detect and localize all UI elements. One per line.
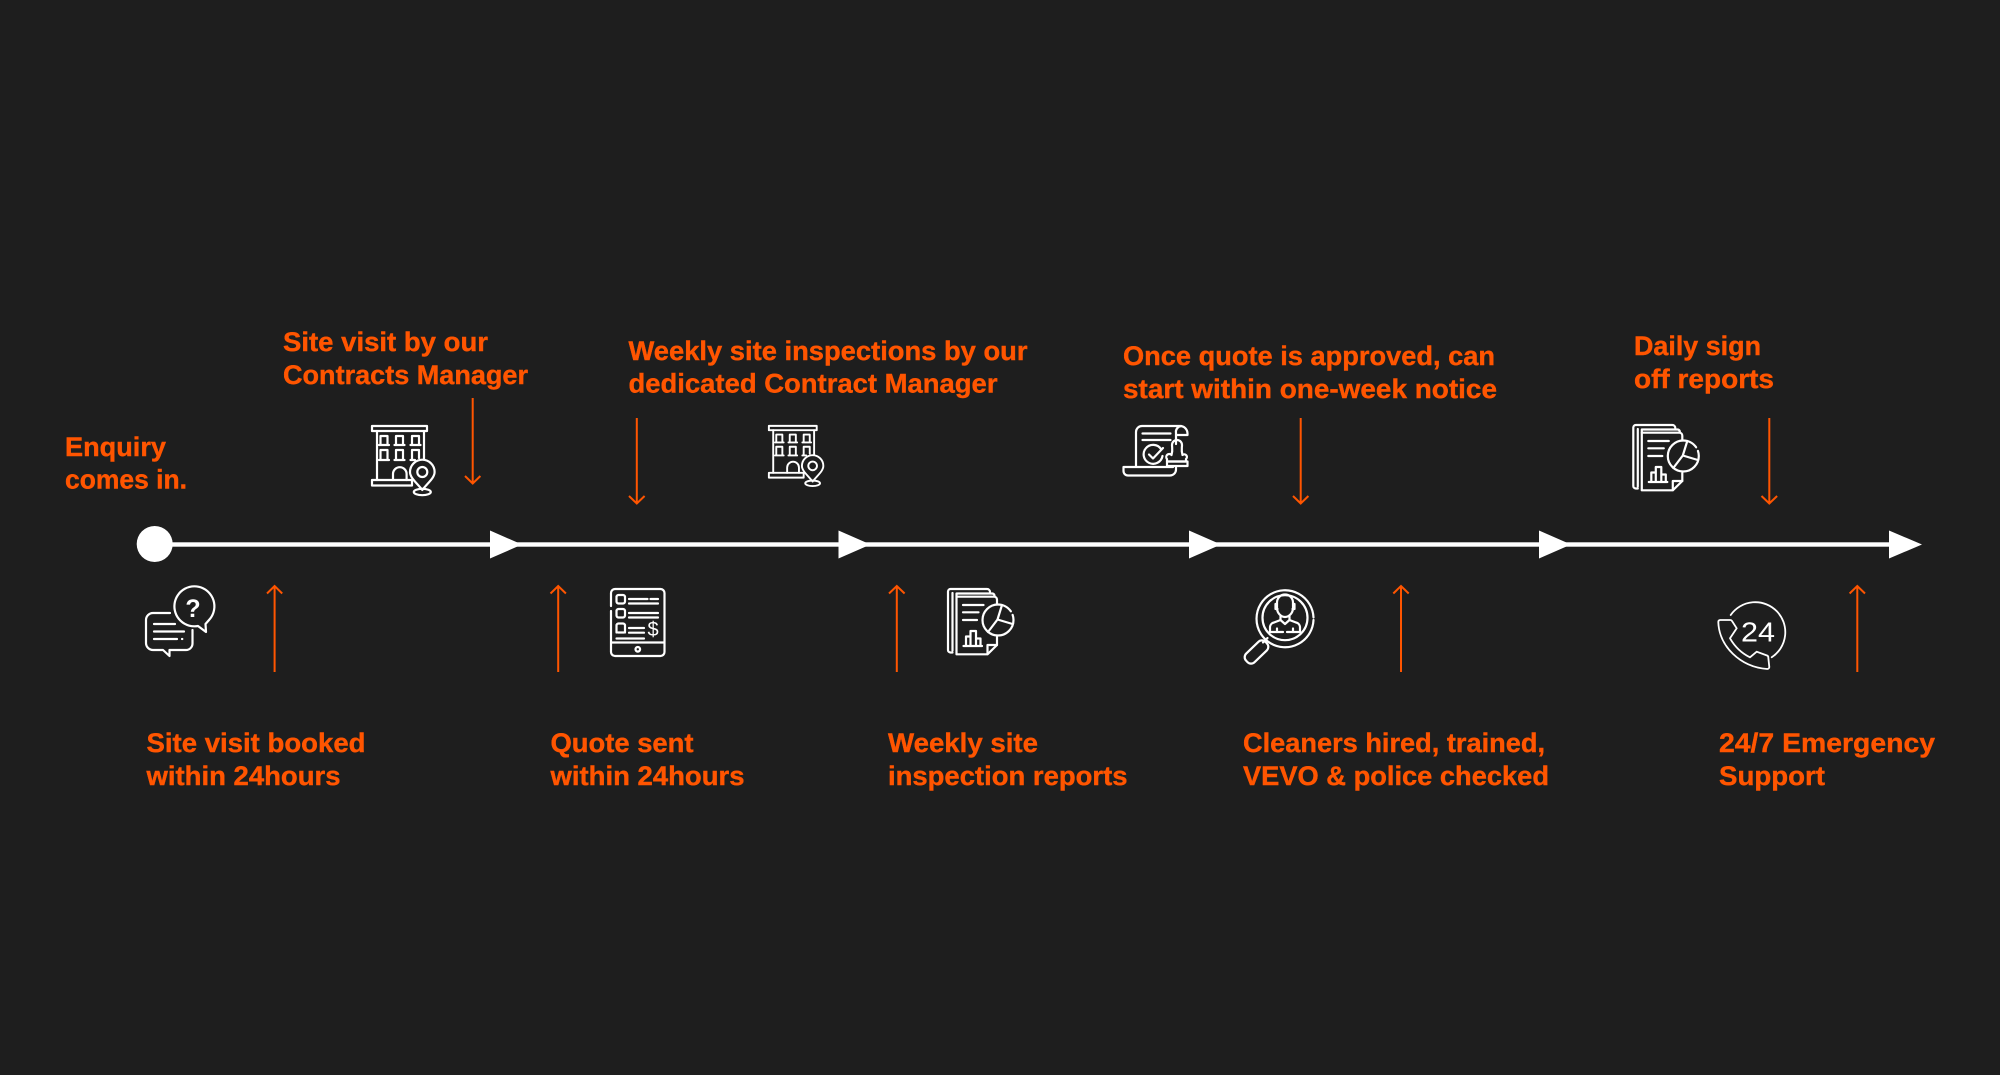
text: Cleaners hired: Cleaners hired, trained, (1243, 728, 1545, 758)
text: Site visit booked: within 24hours (145, 761, 340, 791)
icon: chat bubbles with question (146, 586, 214, 656)
text: Weekly site inspections (628, 336, 1028, 398)
icon: chat bubbles with question: ? (185, 595, 201, 623)
arrow: up 2 (550, 586, 566, 672)
text: Quote sent: within 24hours (549, 761, 744, 791)
text: Site visit booked (145, 728, 366, 791)
arrow: down 2 (629, 418, 645, 504)
arrow: up 5 (1850, 586, 1865, 672)
text: Enquiry comes in: Enquiry (65, 432, 166, 462)
icon: building with pin (372, 426, 435, 495)
arrow: up 3 (889, 586, 905, 672)
arrow: down 4 (1762, 418, 1777, 504)
icon: 24/7 phone (1718, 602, 1785, 669)
text: Once quote is approved: start within one-week notice (1123, 374, 1497, 404)
arrow: down 1 (465, 398, 480, 484)
text: Weekly site inspection reports (888, 728, 1128, 791)
icon: report with pie chart 2 (1633, 425, 1699, 490)
start node (137, 526, 173, 562)
icon: document with stamp (1124, 426, 1188, 476)
text: Quote sent (549, 728, 744, 791)
arrow: down 3 (1293, 418, 1308, 504)
text: Once quote is approved: Once quote is approved, can (1123, 341, 1495, 371)
text: Site visit by our Contracts Manager: Contracts Manager (283, 360, 528, 390)
text: Enquiry comes in (65, 432, 187, 494)
text: Site visit booked: Site visit booked (146, 728, 366, 758)
arrow: up 4 (1393, 586, 1409, 672)
timeline (137, 526, 1922, 562)
text: Once quote is approved (1123, 341, 1497, 404)
text: Weekly site inspection reports: Weekly site (888, 728, 1038, 758)
text: Weekly site inspections: Weekly site inspections by our (628, 336, 1028, 366)
arrowhead 3 (1189, 530, 1221, 558)
text: 24/7 Emergency Support (1719, 728, 1935, 791)
icon: magnifier with person (1243, 590, 1314, 666)
arrowhead 5 (1889, 530, 1922, 558)
text: 24/7 Emergency Support: 24/7 Emergency (1719, 728, 1935, 758)
text: Weekly site inspection reports: inspection reports (888, 761, 1128, 791)
text: Cleaners hired (1243, 728, 1549, 791)
arrow: up 1 (267, 586, 282, 672)
icon: quote tablet (611, 589, 664, 656)
arrowhead 2 (838, 530, 870, 558)
text: Quote sent: Quote sent (550, 728, 694, 758)
text: Enquiry comes in: comes in. (65, 464, 187, 494)
icon: 24/7 phone: 24 (1741, 616, 1775, 648)
text: Daily sign off reports (1634, 331, 1774, 394)
text: Cleaners hired: VEVO & police checked (1243, 761, 1549, 791)
arrowhead 4 (1539, 530, 1571, 558)
text: 24/7 Emergency Support: Support (1719, 761, 1825, 791)
icon: building with pin 2 (769, 426, 823, 486)
arrowhead 1 (490, 530, 522, 558)
text: Weekly site inspections: dedicated Contract Manager (628, 368, 998, 398)
icon: quote tablet: $ (647, 619, 659, 641)
icon: report with pie chart (948, 589, 1014, 654)
text: Site visit by our Contracts Manager (283, 327, 528, 390)
text: Daily sign off reports: Daily sign (1634, 331, 1761, 361)
text: Daily sign off reports: off reports (1634, 364, 1774, 394)
text: Site visit by our Contracts Manager: Site visit by our (283, 327, 488, 357)
